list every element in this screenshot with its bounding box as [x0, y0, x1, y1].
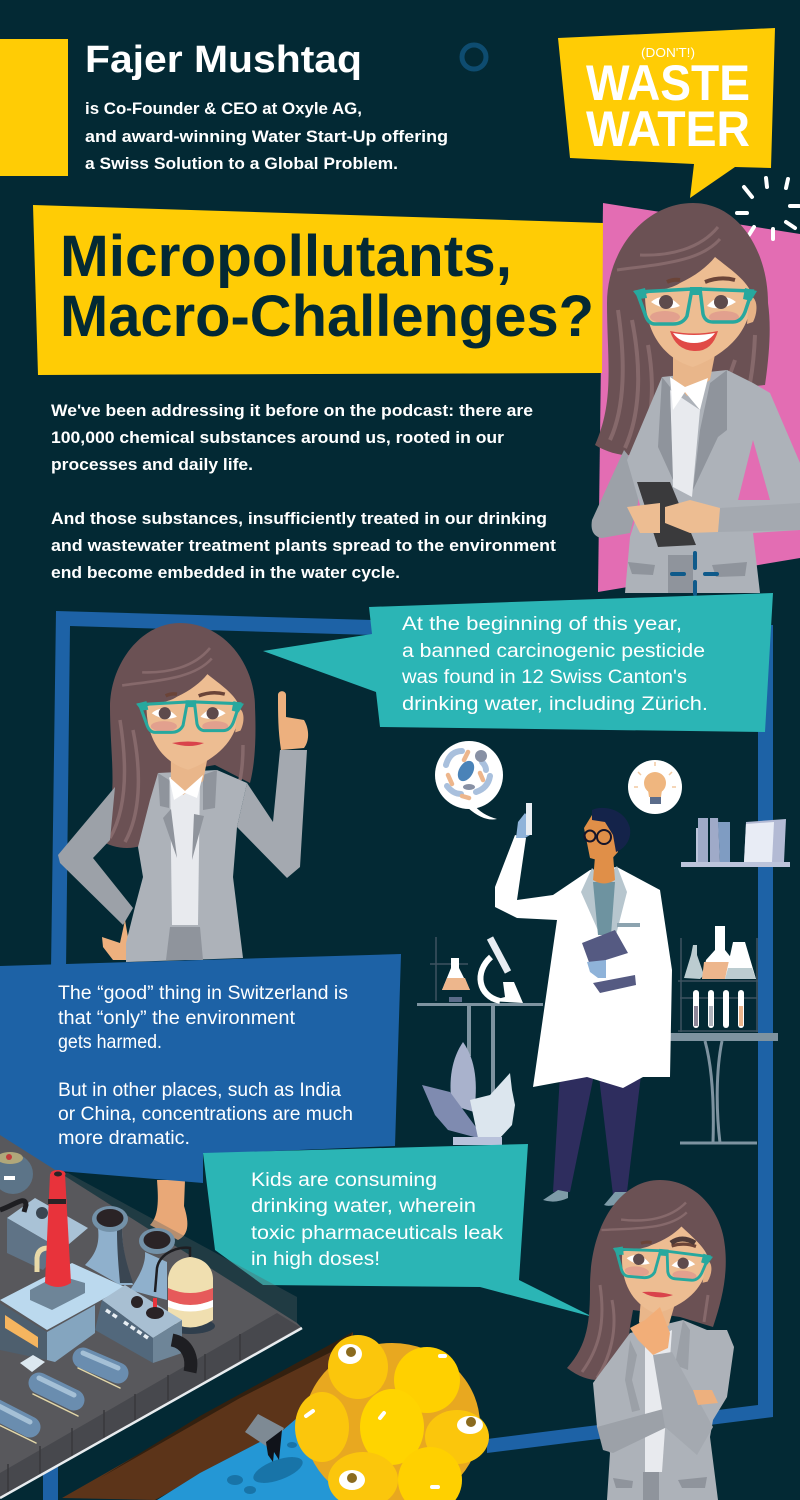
intro text: and wastewater treatment plants spread to the environment — [51, 536, 556, 555]
shirt collar — [670, 377, 708, 410]
long hair — [595, 203, 770, 455]
speech bubble: kids: toxic pharmaceuticals leak — [251, 1223, 504, 1244]
clipboard — [582, 930, 636, 993]
raised glove — [516, 813, 532, 838]
lower hand — [693, 1390, 718, 1405]
icon: microbes bubble — [435, 741, 503, 820]
author description: and award-winning Water Start-Up offering — [85, 127, 448, 146]
lapels — [658, 370, 727, 490]
speech bubble: pesticide: drinking water, including Zürich. — [402, 694, 708, 715]
hair highlights — [582, 1285, 708, 1378]
cream tank — [155, 1248, 215, 1334]
hands — [627, 500, 720, 533]
chimney base — [30, 1275, 85, 1310]
title: Macro-Challenges? — [60, 284, 594, 349]
machine back — [0, 1198, 88, 1272]
plant — [422, 1042, 515, 1145]
coat collar — [581, 866, 627, 935]
holding glove — [587, 960, 606, 978]
mouth — [172, 742, 204, 746]
water — [157, 1418, 370, 1500]
small box — [20, 1355, 45, 1372]
speech bubble: kids — [203, 1144, 593, 1317]
storage cylinders — [0, 1353, 120, 1443]
long hair — [567, 1180, 726, 1380]
badge: don't waste water: (DON'T!) — [641, 45, 695, 60]
main building — [0, 1263, 125, 1362]
face — [584, 815, 618, 863]
intro text: 100,000 chemical substances around us, rooted in our — [51, 428, 504, 447]
collar — [169, 775, 203, 800]
speech bubble: pesticide: a banned carcinogenic pesticide — [402, 641, 705, 662]
face — [122, 648, 244, 795]
panel: switzerland note: that “only” the environment — [58, 1008, 296, 1029]
badge: don't waste water — [558, 28, 775, 198]
left arm — [58, 787, 133, 925]
panel: pink backdrop — [598, 203, 800, 592]
table left — [417, 1003, 543, 1106]
trouser and pockets — [628, 555, 747, 593]
panel: switzerland note: or China, concentrations are much — [58, 1104, 353, 1125]
lower hand — [102, 920, 132, 960]
trousers — [166, 927, 203, 960]
speech bubble: kids: in high doses! — [251, 1249, 380, 1270]
raised arm — [237, 750, 307, 878]
author description: a Swiss Solution to a Global Problem. — [85, 154, 398, 173]
neck — [593, 854, 615, 884]
test tube — [526, 803, 532, 835]
pointing hand — [278, 691, 308, 750]
t-shirt — [593, 882, 615, 935]
phone — [637, 482, 696, 547]
pocket — [617, 923, 640, 927]
flask on stand — [430, 937, 470, 1002]
bank shadow — [100, 1332, 353, 1478]
icon: light bulb — [628, 760, 682, 814]
intro text: processes and daily life. — [51, 455, 253, 474]
illustration: factory — [0, 1135, 302, 1498]
hand on chin — [630, 1307, 670, 1355]
character: presenter pointing up — [58, 623, 308, 962]
shirt — [670, 390, 700, 497]
cooling towers — [85, 1206, 175, 1300]
lapels — [158, 770, 217, 860]
title — [60, 224, 594, 349]
face — [617, 227, 757, 396]
eyes — [338, 1344, 483, 1490]
author description — [85, 99, 448, 173]
panel: switzerland note: But in other places, such as India — [58, 1080, 341, 1101]
illustration: scientist lab — [417, 741, 790, 1206]
author name: Fajer Mushtaq — [85, 39, 362, 81]
scientist — [495, 803, 672, 1206]
panel: switzerland note: gets harmed. — [58, 1032, 162, 1053]
microscope — [480, 938, 523, 1003]
tank top left — [0, 1152, 33, 1194]
leg behind panel — [150, 1180, 187, 1240]
hair — [592, 808, 630, 852]
header: author intro — [85, 39, 448, 173]
black pipe — [172, 1340, 191, 1372]
badge: don't waste water: WASTE — [586, 55, 750, 111]
intro text — [51, 401, 556, 582]
platform — [0, 1135, 302, 1498]
raised brow — [671, 1239, 695, 1243]
intro text: end become embedded in the water cycle. — [51, 563, 400, 582]
rack with flasks — [678, 926, 758, 1032]
panel: switzerland note: more dramatic. — [58, 1128, 190, 1149]
table right — [660, 1033, 778, 1143]
control machine — [95, 1285, 182, 1363]
title: Micropollutants, — [60, 224, 512, 289]
face — [593, 1195, 717, 1342]
left sleeve — [592, 450, 640, 538]
illustration: polluted river — [62, 1332, 489, 1500]
horizontal arm — [597, 1408, 667, 1453]
intro text: We've been addressing it before on the podcast: there are — [51, 401, 533, 420]
highlights — [306, 1356, 445, 1487]
frame: blue outline — [43, 611, 773, 1500]
blazer — [126, 770, 247, 962]
hair highlights — [110, 720, 243, 842]
river bank — [62, 1332, 353, 1500]
character: thinking presenter — [567, 1180, 734, 1500]
blue stitching — [672, 553, 717, 594]
badge: don't waste water: WATER — [586, 101, 750, 157]
speech bubble: pesticide: was found in 12 Swiss Canton's — [401, 667, 687, 688]
accent block: top left — [0, 39, 68, 176]
pollutant blob — [295, 1335, 489, 1500]
speech bubble: kids: Kids are consuming — [251, 1170, 437, 1191]
translucent fence — [30, 1172, 297, 1325]
title panel — [33, 205, 603, 375]
trousers and pockets — [613, 1472, 707, 1500]
panel: switzerland note: The “good” thing in Switzerland is — [58, 983, 348, 1004]
forearm — [653, 1352, 713, 1455]
black ooze — [266, 1430, 282, 1462]
speech bubble: kids: drinking water, wherein — [251, 1196, 476, 1217]
mouth — [642, 1292, 673, 1297]
shirt — [170, 777, 200, 925]
icon: burst lines — [737, 178, 799, 239]
speech bubble: pesticide — [263, 593, 773, 732]
blazer — [593, 1320, 734, 1500]
author description: is Co-Founder & CEO at Oxyle AG, — [85, 99, 362, 118]
hair highlights — [610, 310, 755, 448]
oil slick — [227, 1442, 306, 1494]
blazer — [625, 370, 800, 593]
right sleeve — [718, 503, 800, 532]
trousers — [553, 1060, 641, 1195]
platform white edge — [0, 1328, 302, 1498]
intro text: And those substances, insufficiently treated in our drinking — [51, 509, 547, 528]
panel: switzerland note — [0, 954, 401, 1183]
drain pipe — [245, 1414, 284, 1450]
icon: ring logo — [462, 45, 486, 69]
shelf with books — [681, 818, 790, 867]
smile — [670, 331, 718, 351]
speech bubble: pesticide: At the beginning of this year, — [402, 614, 682, 635]
red chimney — [45, 1170, 71, 1287]
glasses — [584, 830, 611, 844]
lab coat — [495, 835, 672, 1088]
platform edge — [0, 1313, 300, 1497]
shirt — [645, 1330, 672, 1472]
fence posts — [8, 1334, 240, 1492]
character: presenter with phone — [592, 203, 800, 594]
lapels — [625, 1320, 690, 1412]
shoes — [543, 1190, 627, 1206]
hair — [100, 623, 255, 848]
